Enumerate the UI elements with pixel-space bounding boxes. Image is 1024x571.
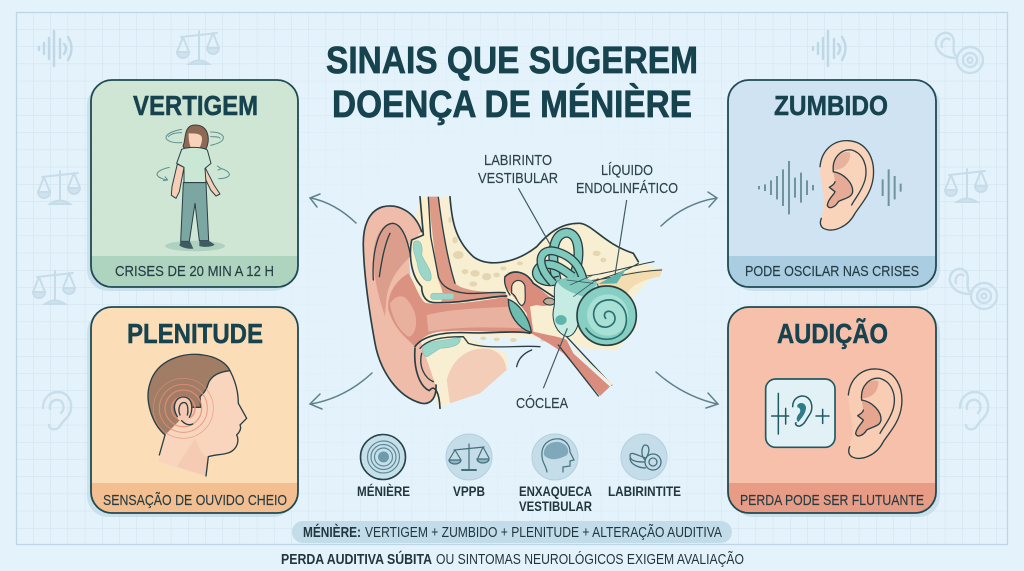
illustration: ear with sound waves <box>759 141 901 230</box>
ossicles <box>512 280 525 306</box>
label: labirinto vestibular <box>478 152 558 187</box>
warning line <box>281 550 744 568</box>
arrow: to vertigem <box>310 194 356 223</box>
warning line: OU SINTOMAS NEUROLÓGICOS EXIGEM AVALIAÇÃO <box>436 551 744 568</box>
panel: audição <box>728 307 940 517</box>
label: enxaqueca vestibular: VESTIBULAR <box>519 499 592 514</box>
nerves <box>583 268 663 300</box>
arrow: to zumbido <box>661 192 717 226</box>
background icons <box>33 31 997 429</box>
summary pill: VERTIGEM + ZUMBIDO + PLENITUDE + ALTERAÇÃO AUDITIVA <box>365 524 722 541</box>
label: labirinto vestibular: VESTIBULAR <box>478 170 558 187</box>
cochlea spiral <box>577 286 636 345</box>
label: líquido endolinfático <box>576 162 678 197</box>
icon: vppb <box>446 434 492 480</box>
bone speckles <box>448 217 606 342</box>
panel: vertigem <box>87 80 298 291</box>
ear canal <box>388 273 530 347</box>
icon: hearing test tile <box>766 379 835 447</box>
label: cóclea: CÓCLEA <box>516 395 568 412</box>
pink tissue band <box>428 197 507 303</box>
caption: zumbido: PODE OSCILAR NAS CRISES <box>745 263 919 280</box>
anatomical ear diagram <box>363 188 663 408</box>
label: labirintite: LABIRINTITE <box>608 484 681 499</box>
semicircular canals <box>537 233 583 283</box>
label: enxaqueca vestibular <box>519 484 592 514</box>
vestibule <box>553 278 598 337</box>
arrow: to plenitude <box>310 373 372 409</box>
title <box>326 40 698 126</box>
icon: ménière <box>360 434 406 480</box>
label: labirinto vestibular: LABIRINTO <box>484 152 552 169</box>
parotid region <box>447 348 507 403</box>
warning line: PERDA AUDITIVA SÚBITA <box>281 550 432 568</box>
middle ear cavity <box>504 272 610 396</box>
summary pill: MÉNIÈRE: <box>303 524 361 541</box>
teal glands <box>413 241 460 357</box>
illustration: head with ear rings <box>148 354 247 477</box>
heading: plenitude: PLENITUDE <box>127 318 263 349</box>
outer ear <box>363 206 435 404</box>
canal wall tissue <box>410 197 467 303</box>
illustration: dizzy woman <box>157 125 229 251</box>
label: enxaqueca vestibular: ENXAQUECA <box>519 484 592 499</box>
leader lines <box>518 188 627 388</box>
label: líquido endolinfático: LÍQUIDO <box>601 162 653 179</box>
temporal bone <box>410 197 660 408</box>
summary pill <box>292 521 732 543</box>
label: líquido endolinfático: ENDOLINFÁTICO <box>576 180 678 197</box>
panel: zumbido <box>728 80 940 291</box>
caption: plenitude: SENSAÇÃO DE OUVIDO CHEIO <box>103 492 287 509</box>
label: ménière: MÉNIÈRE <box>357 484 410 499</box>
heading: vertigem: VERTIGEM <box>133 90 258 121</box>
heading: audição: AUDIÇÃO <box>777 318 888 349</box>
panel: plenitude <box>87 307 298 517</box>
illustration: large ear <box>848 369 902 458</box>
label: vppb: VPPB <box>453 484 485 499</box>
caption: audição: PERDA PODE SER FLUTUANTE <box>740 492 924 509</box>
heading: zumbido: ZUMBIDO <box>774 90 888 121</box>
icon: enxaqueca vestibular <box>532 434 578 480</box>
icon: labirintite <box>621 434 667 480</box>
eardrum <box>508 299 531 333</box>
caption: vertigem: CRISES DE 20 MIN A 12 H <box>115 263 274 280</box>
lower canal wall <box>415 332 530 347</box>
arrow: to audição <box>656 372 718 408</box>
title: SINAIS QUE SUGEREM <box>326 40 698 82</box>
title: DOENÇA DE MÉNIÈRE <box>332 82 692 126</box>
